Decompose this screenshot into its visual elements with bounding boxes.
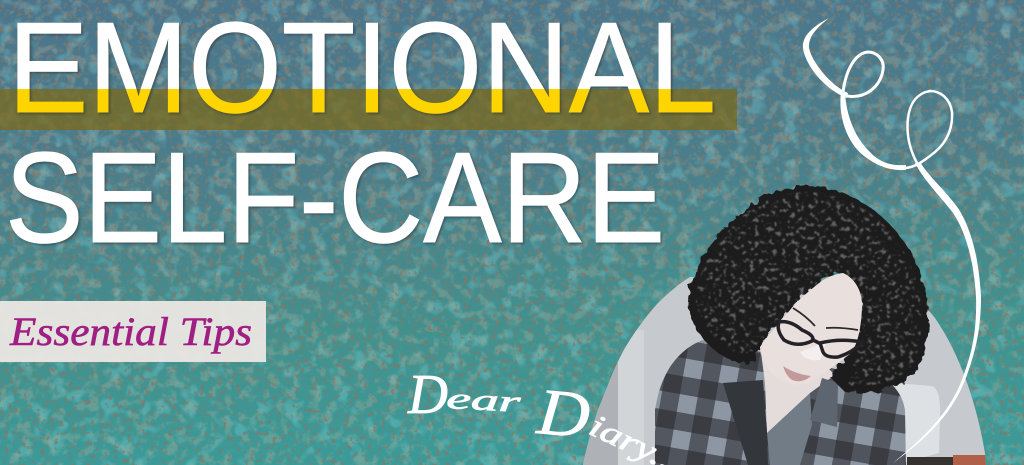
window frame [583, 330, 644, 465]
collar [723, 378, 838, 465]
title line 2: SELF-CARE [5, 126, 665, 270]
handwritten text: Dear Diary [407, 364, 690, 465]
subtitle label: Essential Tips: Essential Tips [9, 309, 252, 354]
highlight band behind title [0, 89, 737, 130]
word: Diary: D [534, 375, 593, 452]
title line 1: white part: EMOTIONAL [8, 0, 716, 140]
word: Dear: D [407, 364, 448, 426]
hair [688, 186, 928, 393]
word: Diary [534, 375, 690, 465]
ribbon: thick segments [803, 18, 981, 463]
word: Dear: ear [446, 382, 522, 419]
word: Dear [407, 364, 522, 426]
title: Emotional Self-Care [10, 21, 715, 246]
title line 1: yellow part: EMOTIONAL [8, 0, 716, 140]
items on shelf [907, 455, 986, 465]
face [760, 273, 862, 385]
subtitle label: Essential Tips [0, 301, 266, 362]
photo: woman writing in a circle [583, 277, 986, 465]
decorative ribbon swirl [803, 18, 981, 463]
shirt inner [767, 393, 812, 465]
white cushion [895, 383, 940, 465]
nose highlight [800, 342, 826, 360]
ribbon: thin loops [843, 52, 952, 168]
lips [783, 366, 811, 381]
neck [760, 340, 835, 433]
eyebrows [793, 308, 858, 330]
glasses [778, 322, 862, 357]
woman figure [655, 186, 928, 465]
wall [583, 277, 986, 465]
plaid shirt [655, 340, 906, 465]
